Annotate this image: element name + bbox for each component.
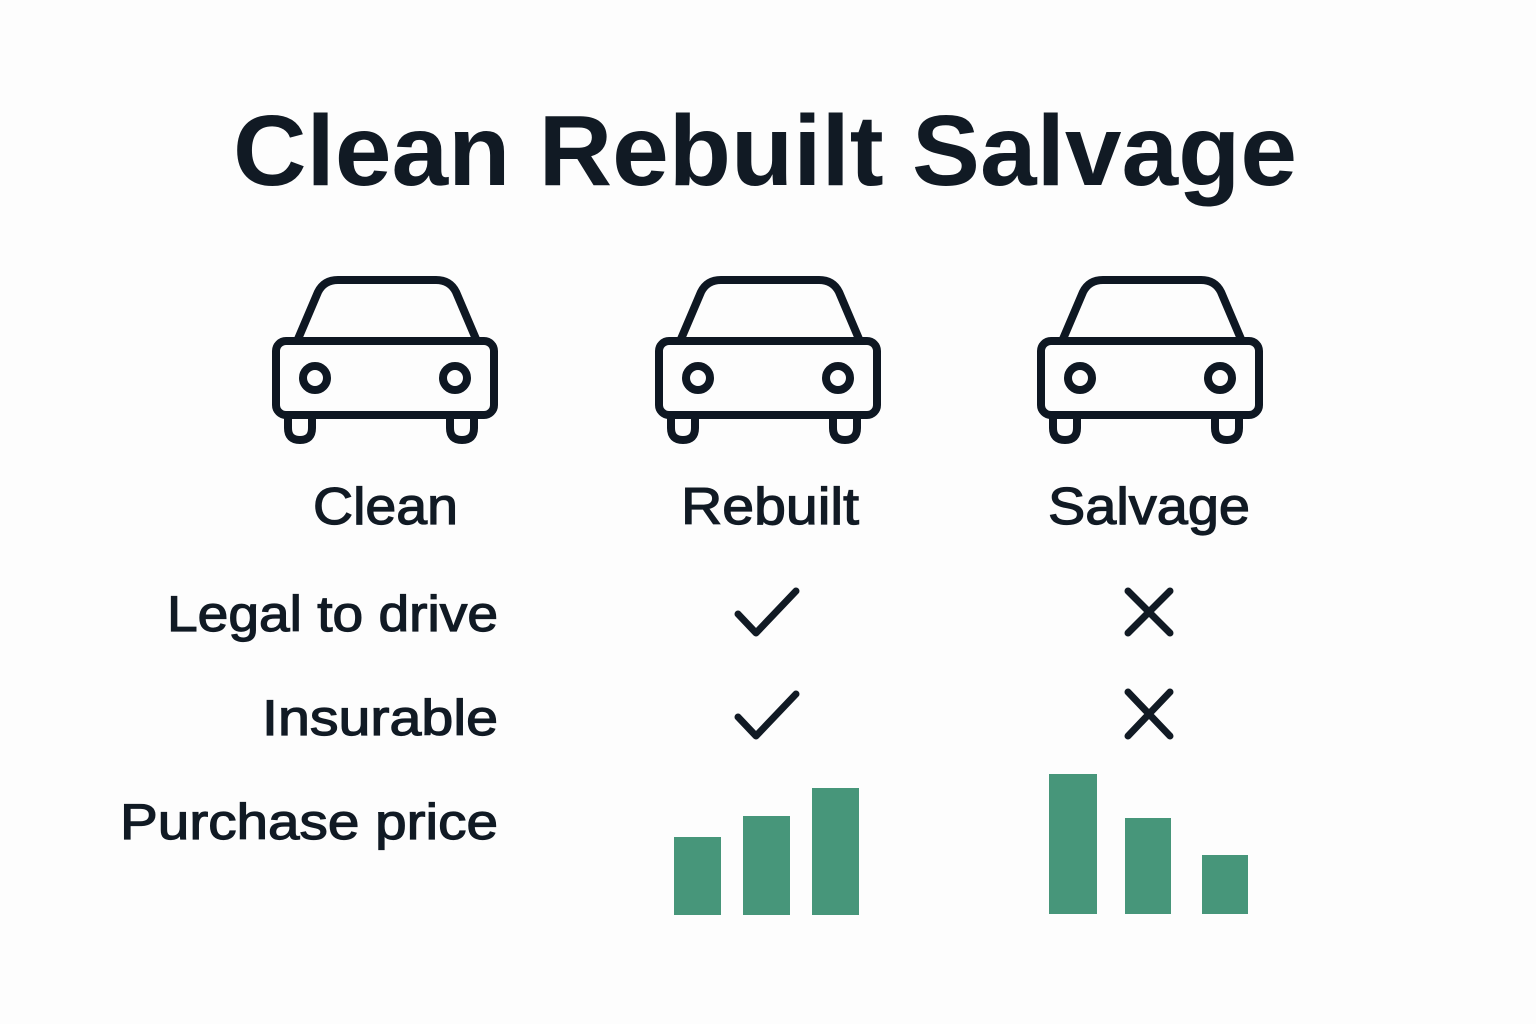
bar chart: rebuilt	[674, 788, 859, 915]
bar chart: salvage	[1049, 774, 1248, 914]
column labels	[313, 478, 1250, 536]
column labels: Salvage	[1048, 478, 1250, 536]
column labels: Rebuilt	[681, 478, 860, 536]
icon: car rebuilt	[659, 280, 877, 440]
icon: car clean	[276, 280, 494, 440]
icon: checks	[738, 591, 796, 736]
column labels: Clean	[313, 478, 458, 536]
row labels	[120, 586, 498, 850]
row labels: Insurable	[262, 690, 498, 746]
icon: crosses	[1128, 591, 1170, 736]
row labels: Purchase price	[120, 794, 498, 850]
title: Clean Rebuilt Salvage	[233, 95, 1297, 207]
icon: car salvage	[1041, 280, 1259, 440]
row labels: Legal to drive	[167, 586, 498, 642]
